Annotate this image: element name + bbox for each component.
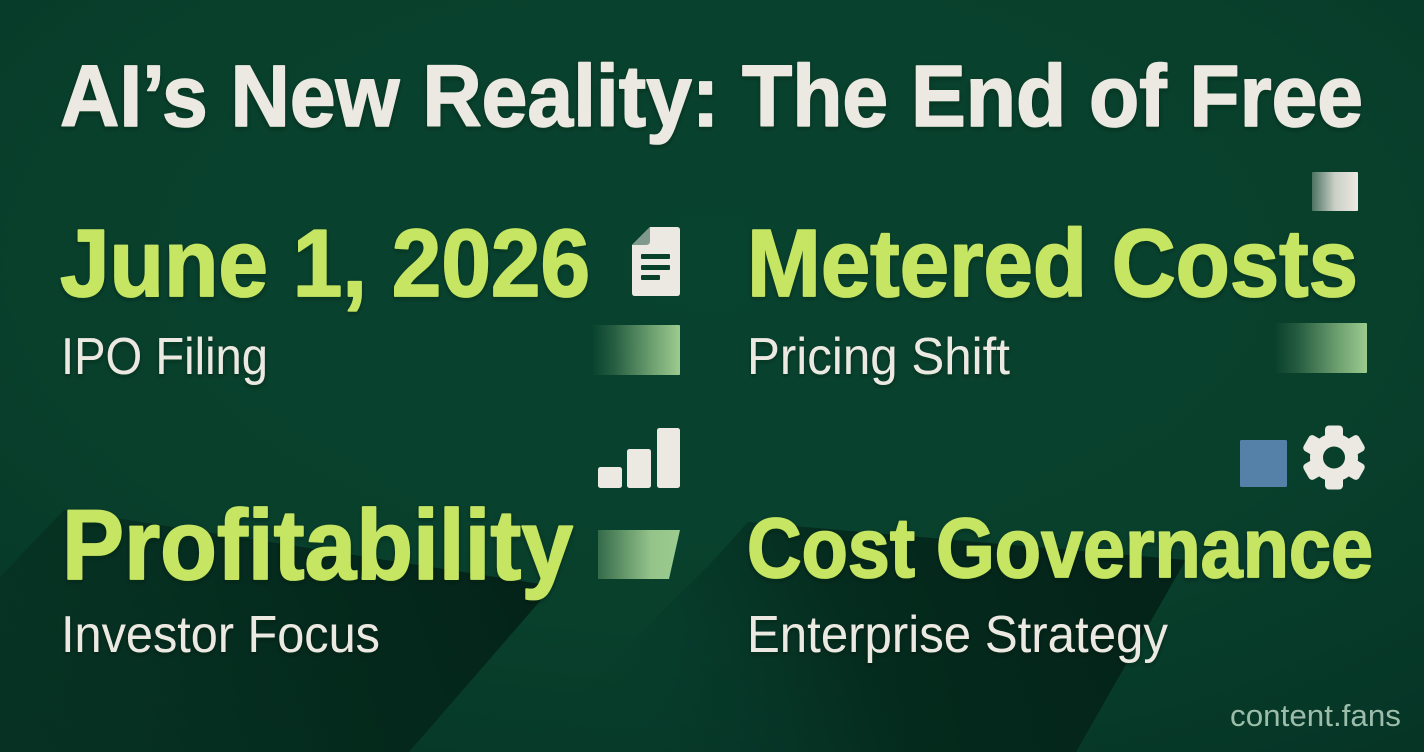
gradient swatch: trapezoid — [598, 530, 680, 579]
subtext: Enterprise Strategy: Enterprise Strategy — [747, 606, 1168, 664]
icon: document — [632, 227, 680, 296]
icon: gear — [1302, 426, 1366, 490]
gradient swatch: green — [1275, 323, 1367, 373]
panel: profitability — [61, 428, 680, 664]
diagonal shadow: left — [0, 510, 553, 752]
watermark: content.fans — [1230, 698, 1401, 733]
panel: cost governance — [747, 426, 1373, 664]
icon: bar chart — [598, 428, 680, 488]
heading: June 1, 2026: June 1, 2026 — [60, 210, 590, 317]
panel: metered costs — [747, 172, 1367, 386]
diagonal shadow: centre — [520, 522, 1186, 752]
subtext: Investor Focus: Investor Focus — [61, 606, 380, 664]
gradient swatch: white — [1312, 172, 1358, 211]
subtext: IPO Filing: IPO Filing — [61, 328, 268, 386]
heading: Cost Governance: Cost Governance — [747, 501, 1373, 595]
gradient swatch: green — [592, 325, 680, 375]
icon: blue square — [1240, 440, 1287, 487]
panel: IPO filing — [60, 210, 680, 386]
heading: Profitability: Profitability — [62, 489, 573, 600]
title: AI’s New Reality: The End of Free — [60, 48, 1363, 145]
subtext: Pricing Shift: Pricing Shift — [747, 328, 1011, 386]
heading: Metered Costs: Metered Costs — [747, 210, 1358, 317]
